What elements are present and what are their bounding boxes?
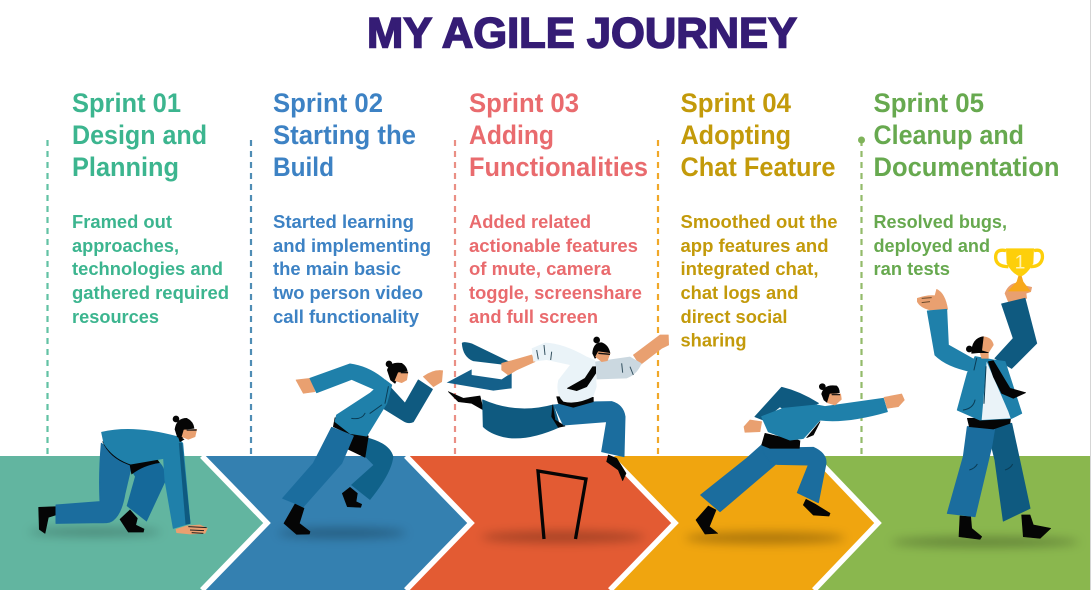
heading: sprint 05 bbox=[874, 88, 1060, 182]
text block: sprint 01 description: Framed out bbox=[72, 211, 172, 232]
heading: sprint 04: Adopting bbox=[680, 120, 791, 150]
heading: sprint 01: Design and bbox=[72, 120, 207, 150]
panel: sprint 01 bbox=[72, 88, 229, 327]
text block: sprint 01 description: gathered required bbox=[72, 282, 229, 303]
text block: sprint 04 description: integrated chat, bbox=[680, 258, 818, 279]
heading: sprint 03: Sprint 03 bbox=[469, 88, 579, 118]
text block: sprint 04 description: direct social bbox=[680, 306, 788, 327]
heading: sprint 05: Sprint 05 bbox=[874, 88, 984, 118]
figure: sprinting runner bbox=[283, 361, 443, 534]
icon: trophy: 1 bbox=[1015, 252, 1025, 273]
text block: sprint 01 description: approaches, bbox=[72, 235, 179, 256]
panel: sprint 03 bbox=[469, 88, 648, 327]
heading: sprint 02: Build bbox=[273, 152, 334, 182]
text block: sprint 02 description: Started learning bbox=[273, 211, 414, 232]
heading: sprint 04: Sprint 04 bbox=[680, 88, 791, 118]
heading: sprint 04: Chat Feature bbox=[680, 152, 836, 182]
text block: sprint 05 description: Resolved bugs, bbox=[874, 211, 1007, 232]
heading: sprint 01 bbox=[72, 88, 207, 182]
hurdle bbox=[538, 471, 586, 539]
text block: sprint 03 description bbox=[469, 211, 642, 327]
text block: sprint 04 description: sharing bbox=[680, 330, 746, 350]
heading: sprint 05: Cleanup and bbox=[874, 120, 1024, 150]
heading: sprint 01: Planning bbox=[72, 152, 179, 182]
heading: sprint 02: Sprint 02 bbox=[273, 88, 383, 118]
heading: sprint 05: Documentation bbox=[874, 152, 1060, 182]
text block: sprint 04 description: Smoothed out the bbox=[680, 211, 838, 232]
panel: sprint 04 bbox=[680, 88, 838, 350]
text block: sprint 04 description: chat logs and bbox=[680, 282, 798, 303]
icon: trophy bbox=[996, 248, 1042, 291]
text block: sprint 05 description bbox=[874, 211, 1007, 279]
heading: sprint 01: Sprint 01 bbox=[72, 88, 181, 118]
text block: sprint 05 description: deployed and bbox=[874, 235, 990, 256]
text block: sprint 05 description: ran tests bbox=[874, 258, 950, 279]
panel: sprint 05 bbox=[874, 88, 1060, 279]
text block: sprint 02 description: the main basic bbox=[273, 258, 401, 279]
figure: runner leaping the hurdle bbox=[447, 335, 669, 481]
text block: sprint 02 description bbox=[273, 211, 431, 327]
text block: sprint 04 description: app features and bbox=[680, 235, 828, 256]
heading: sprint 03: Adding bbox=[469, 120, 554, 150]
figure: runner striding forward bbox=[696, 384, 904, 534]
text block: sprint 03 description: of mute, camera bbox=[469, 258, 612, 279]
text block: sprint 04 description bbox=[680, 211, 838, 350]
text block: sprint 01 description: resources bbox=[72, 306, 159, 327]
text block: sprint 03 description: and full screen bbox=[469, 306, 598, 327]
text block: sprint 03 description: toggle, screenshare bbox=[469, 282, 642, 303]
heading: sprint 02: Starting the bbox=[273, 120, 416, 150]
text block: sprint 02 description: and implementing bbox=[273, 235, 431, 256]
ground track with five chevrons bbox=[0, 456, 1090, 590]
text block: sprint 02 description: call functionality bbox=[273, 306, 420, 327]
title: MY AGILE JOURNEY bbox=[367, 10, 797, 58]
text block: sprint 01 description bbox=[72, 211, 229, 327]
heading: sprint 03: Functionalities bbox=[469, 152, 648, 182]
text block: sprint 02 description: two person video bbox=[273, 282, 423, 303]
panel: sprint 02 bbox=[273, 88, 431, 327]
text block: sprint 01 description: technologies and bbox=[72, 258, 223, 279]
heading: sprint 03 bbox=[469, 88, 648, 182]
heading: sprint 02 bbox=[273, 88, 416, 182]
figure: crouching runner at start bbox=[39, 416, 207, 534]
text block: sprint 03 description: Added related bbox=[469, 211, 591, 232]
heading: sprint 04 bbox=[680, 88, 836, 182]
text block: sprint 03 description: actionable features bbox=[469, 235, 638, 256]
figure: winner holding trophy bbox=[917, 248, 1051, 539]
